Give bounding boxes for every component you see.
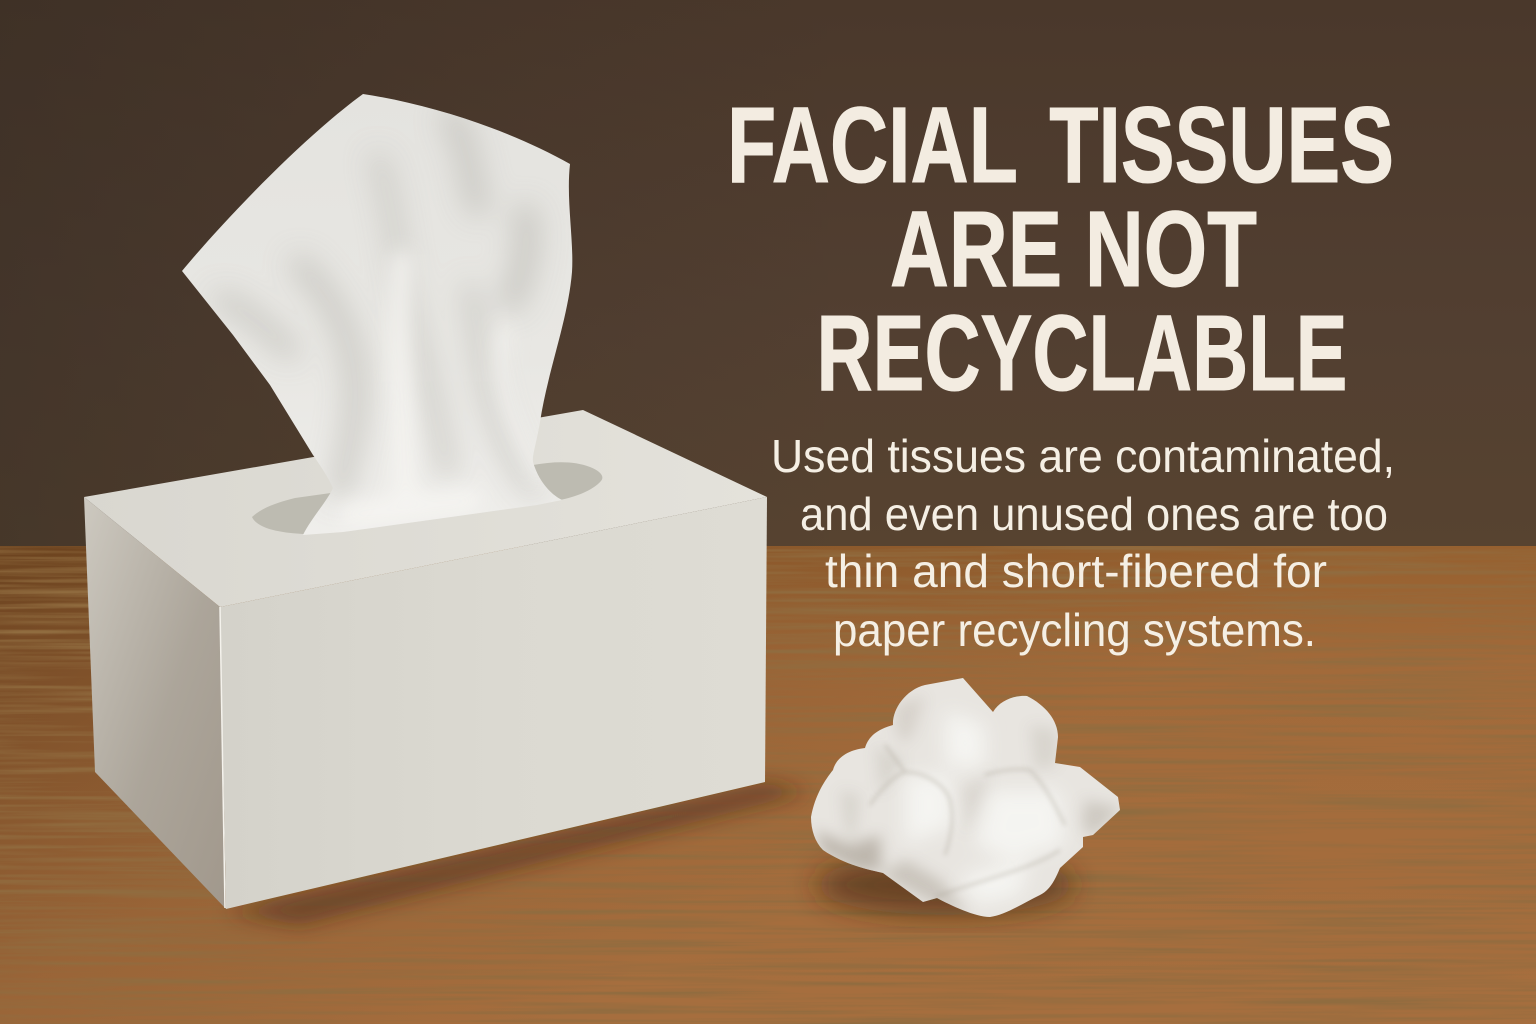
title: RECYCLABLE	[816, 292, 1348, 413]
box left end	[84, 497, 226, 909]
box opening	[252, 462, 602, 534]
description text: thin and short-fibered for	[825, 545, 1327, 597]
box top	[84, 410, 767, 607]
description text	[771, 430, 1395, 656]
tissue pulled from box	[182, 94, 572, 535]
box front side	[220, 497, 767, 909]
description text: Used tissues are contaminated,	[771, 430, 1395, 482]
box seam	[220, 607, 225, 908]
wooden table	[0, 546, 1536, 1024]
description text: and even unused ones are too	[800, 488, 1388, 540]
description text: paper recycling systems.	[833, 604, 1316, 656]
tissue box	[84, 410, 767, 909]
title	[727, 84, 1394, 413]
crumpled tissue shadow	[815, 855, 1075, 915]
box shadow	[226, 782, 810, 925]
title: ARE NOT	[890, 188, 1257, 309]
crumpled tissue	[811, 678, 1122, 917]
background wall	[0, 0, 1536, 546]
